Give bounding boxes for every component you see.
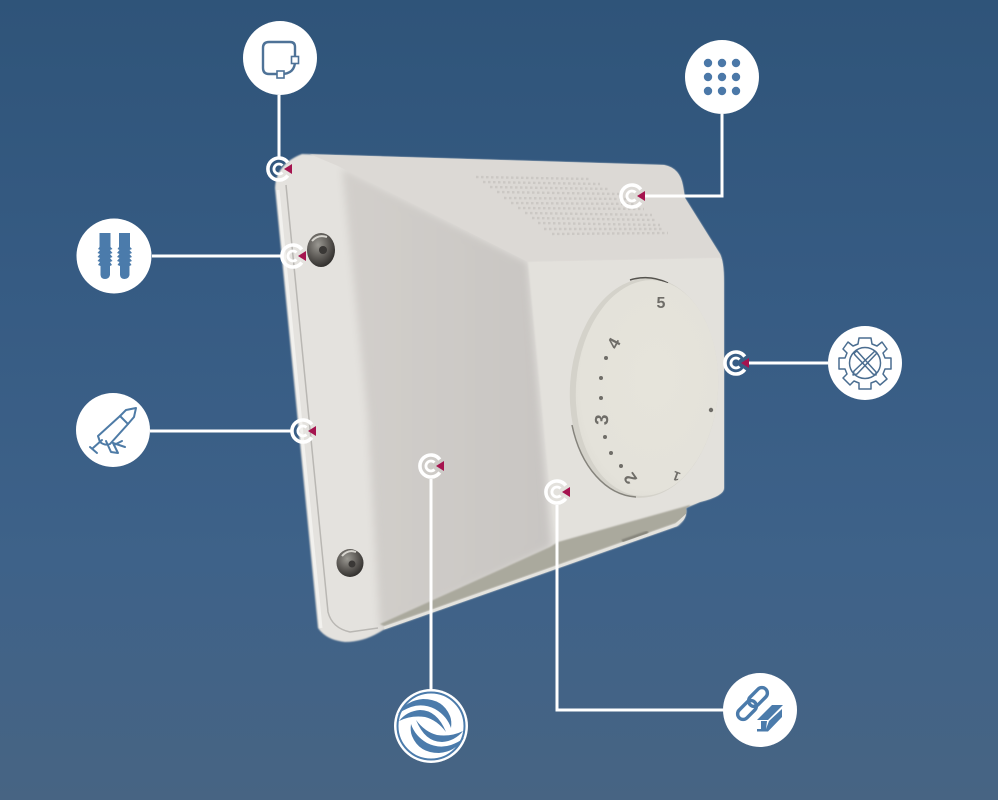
upper waves — [398, 699, 451, 732]
marker: perforation — [621, 185, 645, 207]
large sloped face — [342, 168, 552, 630]
underside streak — [622, 532, 648, 541]
dial numbers: 5 — [657, 295, 666, 312]
dial numbers: 1 — [670, 468, 682, 485]
marker: dowels — [282, 245, 306, 267]
connector: steel link — [557, 505, 724, 710]
dial — [563, 273, 725, 503]
marker: steel link — [546, 481, 570, 503]
screw top — [307, 233, 335, 267]
dial cap — [569, 275, 725, 501]
marker: top-left — [268, 158, 292, 180]
steel beam — [757, 705, 783, 732]
marker: sealant — [292, 420, 316, 442]
plate groove — [286, 185, 378, 632]
marker: material — [420, 455, 444, 477]
connector: perforation — [642, 114, 722, 196]
plate highlight — [278, 190, 321, 628]
device: white wall-mounted controller — [275, 150, 726, 642]
top face — [300, 150, 724, 262]
right plug — [117, 233, 132, 279]
connector: dowels — [152, 254, 281, 258]
chain links — [735, 685, 770, 722]
connector: material — [430, 479, 432, 690]
connector: top-left — [278, 95, 280, 158]
underside shadow strip — [380, 505, 690, 626]
dial lower shadow — [572, 425, 636, 497]
dial numbers: 3 — [592, 414, 613, 425]
vent perforations — [476, 177, 668, 234]
icon: chain link and steel beam — [723, 673, 797, 747]
dial numbers — [592, 295, 713, 487]
icon: nine dots grid — [685, 40, 759, 114]
icon: wall plugs — [76, 218, 152, 294]
marker: adjustment gear — [725, 352, 749, 374]
device shaded faces — [278, 150, 726, 632]
icon: caulking gun — [76, 393, 150, 467]
connector: adjustment gear — [745, 362, 828, 364]
dial top shadow — [630, 278, 668, 283]
icon: rounded square with handles — [243, 21, 317, 95]
underside lower lip — [384, 515, 687, 628]
screw bottom — [336, 549, 364, 577]
lower waves — [411, 720, 464, 753]
dial numbers: 4 — [604, 334, 625, 352]
dial bevel — [563, 273, 725, 503]
dial numbers: 2 — [620, 469, 641, 487]
connector: sealant — [150, 430, 291, 432]
icon: gear with crossed tools — [828, 326, 902, 400]
device silhouette — [275, 154, 724, 642]
left plug — [98, 233, 112, 279]
icon: water waves emblem — [394, 689, 468, 763]
front face — [529, 258, 724, 506]
